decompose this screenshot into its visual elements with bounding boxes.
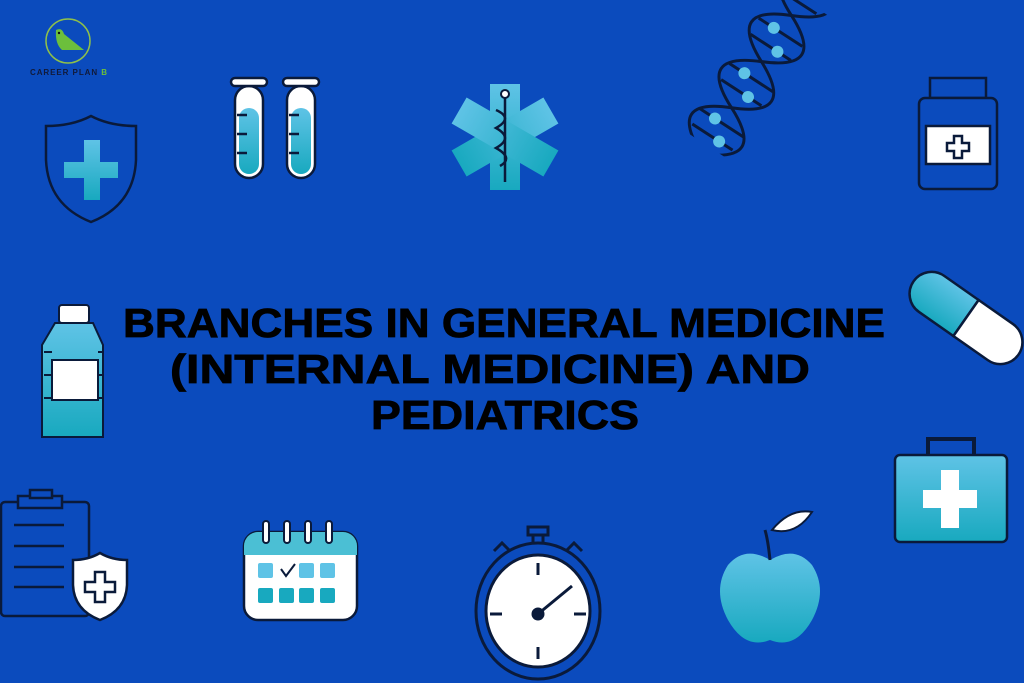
logo: Career Plan B: CAREER PLAN B <box>30 68 107 77</box>
title <box>123 300 885 438</box>
icon: stopwatch <box>476 527 600 679</box>
icon: clipboard with shield <box>1 490 127 620</box>
icon: shield with cross <box>46 116 136 222</box>
icon: calendar <box>244 521 357 620</box>
logo: Career Plan B <box>30 19 107 77</box>
icon: capsule <box>901 263 1024 373</box>
icon: water bottle <box>42 305 104 437</box>
title: PEDIATRICS <box>371 392 639 438</box>
title: BRANCHES IN GENERAL MEDICINE <box>123 300 885 346</box>
icon: first aid kit <box>895 439 1007 542</box>
icon: star of life <box>452 84 558 190</box>
icon: DNA helix <box>688 0 828 156</box>
icon: medicine jar <box>919 78 997 189</box>
title: (INTERNAL MEDICINE) AND <box>170 346 810 392</box>
icon: test tubes <box>231 78 319 178</box>
icon: apple <box>720 511 820 642</box>
